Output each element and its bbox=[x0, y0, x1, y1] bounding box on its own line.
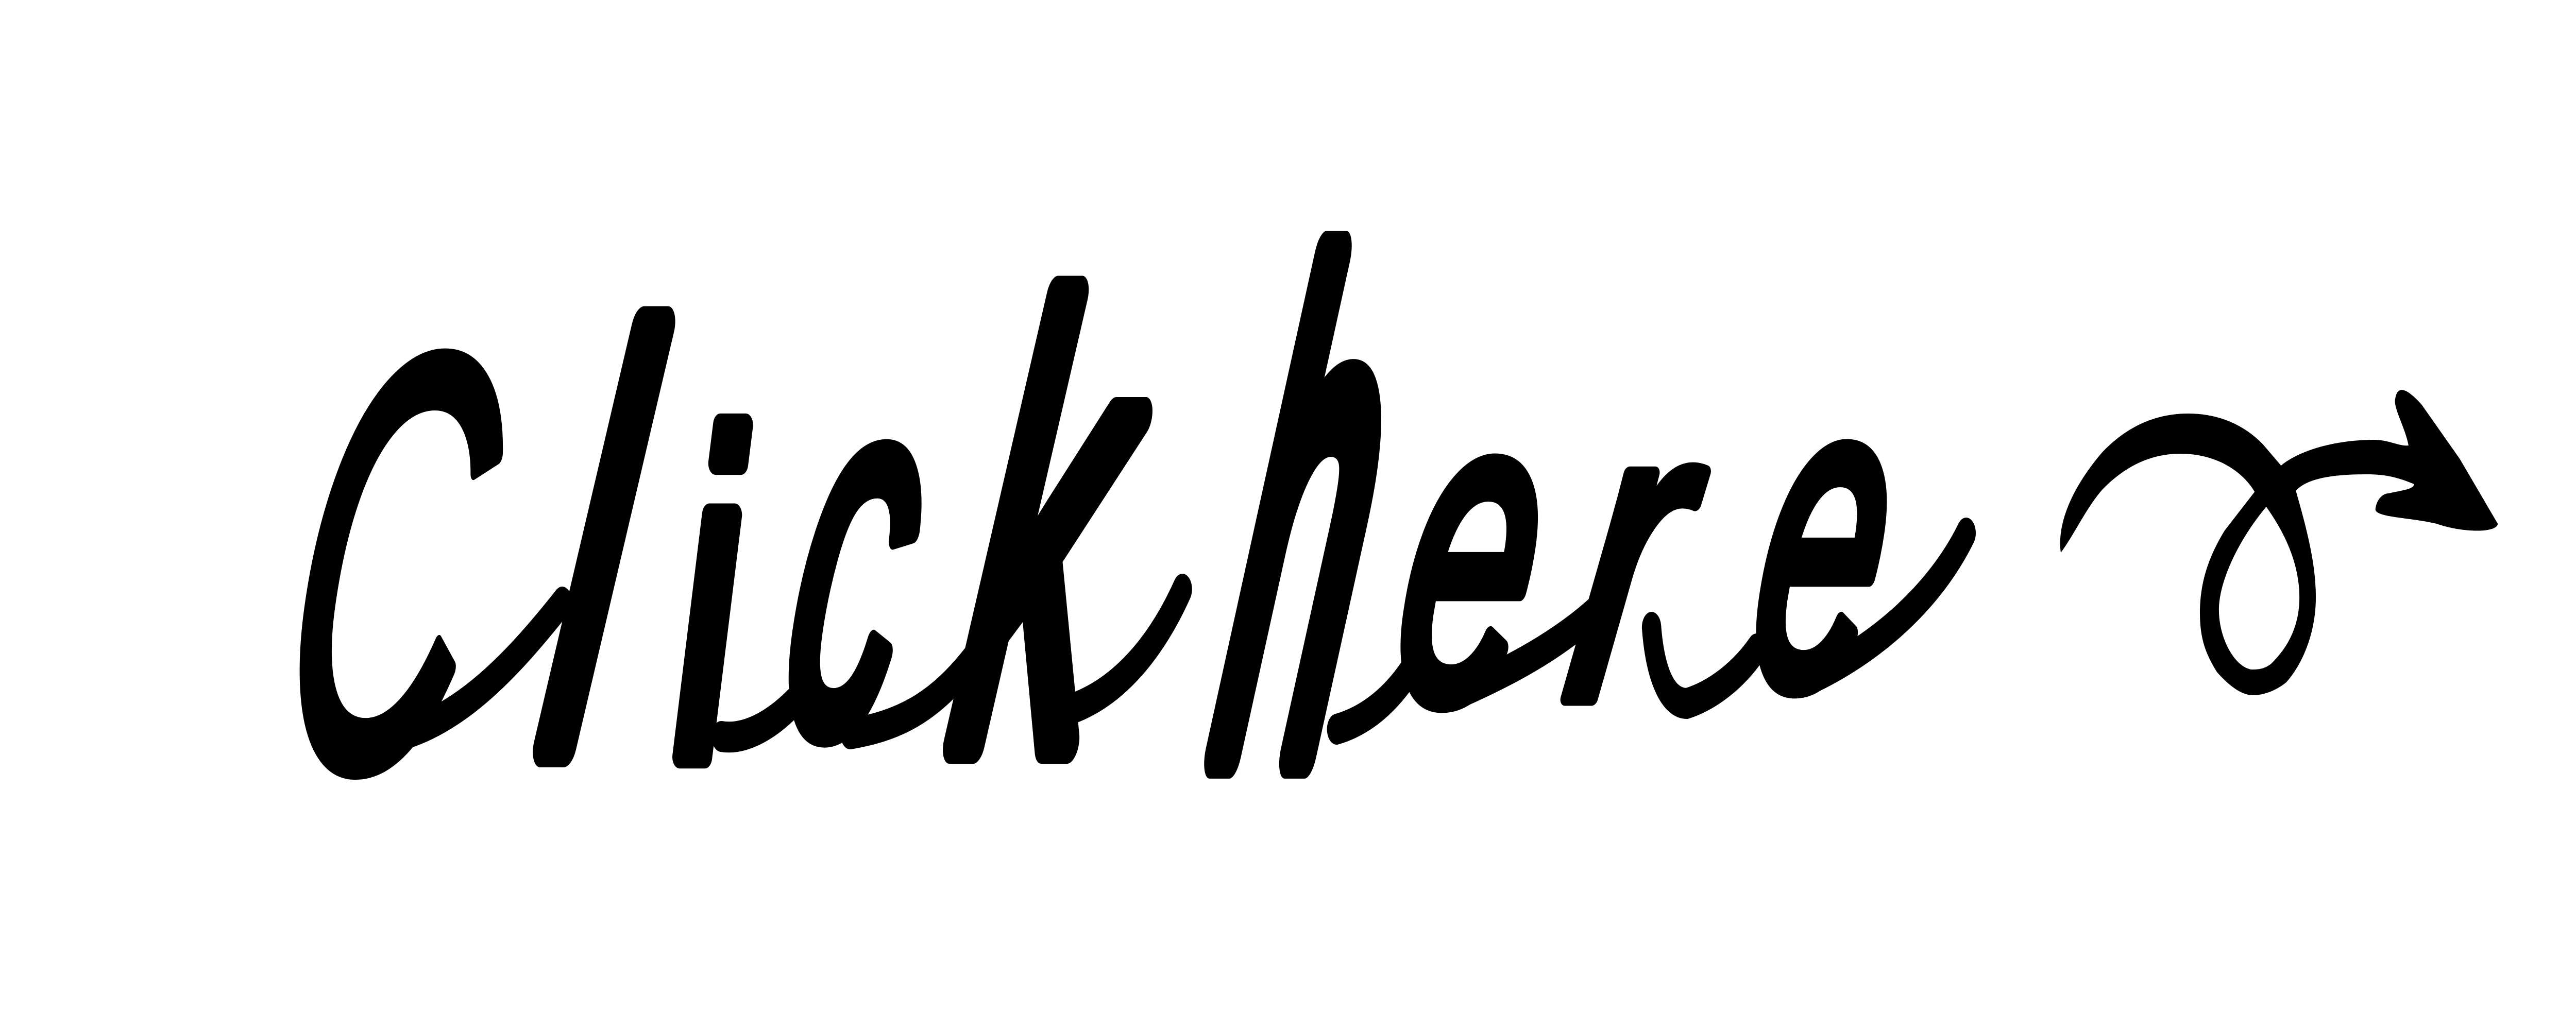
letter i: i bbox=[675, 342, 748, 854]
letter k: k bbox=[929, 185, 1178, 875]
letter e: e bbox=[1731, 288, 1923, 778]
letter c: c bbox=[760, 261, 956, 842]
word: Click bbox=[253, 185, 1178, 889]
letter e: e bbox=[1375, 303, 1574, 792]
joining pen strokes between letters bbox=[377, 533, 1966, 740]
letter C: C bbox=[253, 236, 532, 889]
handwritten heading: Click here bbox=[253, 133, 1966, 899]
letter r: r bbox=[1548, 314, 1731, 789]
word: here bbox=[1187, 133, 1923, 899]
letter l: l bbox=[521, 224, 681, 868]
letter h: h bbox=[1187, 133, 1432, 899]
arrow: looping hand-drawn arrow pointing right bbox=[2060, 390, 2498, 695]
